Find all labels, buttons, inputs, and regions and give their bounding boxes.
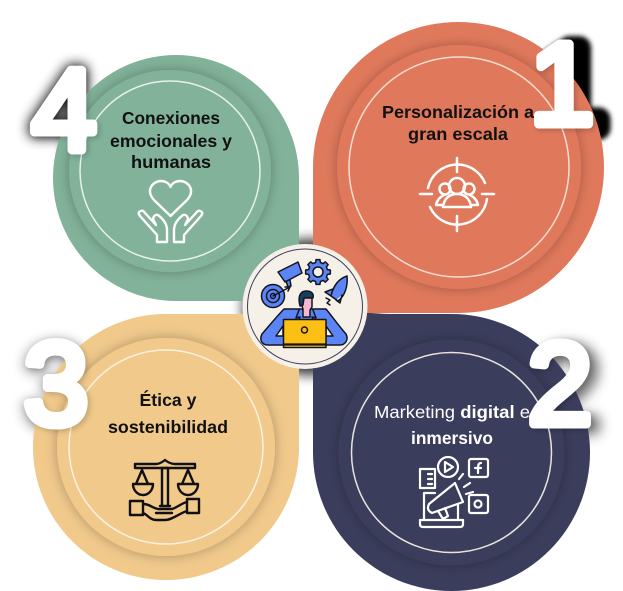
panel: conexiones emocionales (53, 55, 299, 301)
inner circle: green (69, 70, 271, 272)
number 4: 4 (32, 45, 96, 175)
illustration: marketer with laptop (261, 260, 347, 348)
arm gaps (276, 326, 333, 336)
heading: personalización: gran escala (408, 124, 508, 144)
person neck and face (302, 296, 312, 317)
heading: ética: Ética y (140, 389, 197, 410)
badge disc (242, 244, 368, 369)
sparks (326, 298, 330, 305)
inner circle: orange (337, 45, 581, 289)
panel: ética y sostenibilidad (33, 314, 299, 580)
target (262, 284, 290, 308)
number shadows behind petals: 4 (32, 45, 96, 175)
icon: audience target (420, 158, 494, 231)
heading: conexiones: emocionales y (110, 131, 232, 151)
heading: conexiones: humanas (131, 152, 211, 172)
number 2: 2 (528, 319, 592, 449)
icon: scale and hands (130, 460, 199, 520)
petal: green (53, 55, 299, 301)
panel: marketing digital (313, 314, 590, 591)
collar (296, 310, 316, 322)
person body (261, 309, 347, 345)
heading: ética: sostenibilidad (108, 417, 228, 437)
number 1: 1 (530, 19, 594, 149)
gear (306, 260, 330, 284)
heading: marketing digital: Marketing digital e (374, 402, 529, 422)
inner circle: tan (57, 338, 275, 556)
number 3: 3 (24, 319, 88, 449)
heading: personalización: Personalización a (382, 102, 534, 122)
petal: orange (313, 22, 604, 313)
megaphone (278, 262, 302, 287)
heading: marketing digital: inmersivo (411, 428, 493, 448)
number shadows behind petals: 1 (540, 23, 604, 153)
heading: conexiones: Conexiones (122, 108, 220, 128)
number shadows behind petals: 3 (24, 322, 88, 452)
number shadows behind petals: 2 (536, 324, 600, 454)
petal: tan (33, 314, 299, 580)
ring: navy (352, 352, 552, 552)
inner circle: navy (338, 340, 564, 566)
person hair (299, 291, 313, 306)
badge shadow seen through the gaps (243, 239, 379, 375)
icon: digital megaphone (420, 457, 488, 527)
petal: navy (313, 314, 590, 591)
badge ring (248, 249, 362, 364)
rocket (325, 276, 347, 303)
ring: green (80, 81, 260, 261)
ring: tan (69, 350, 263, 544)
number shadows behind petals (24, 23, 604, 454)
icon: heart in hands (139, 181, 202, 242)
panel: personalización (313, 22, 604, 313)
laptop (284, 320, 326, 348)
ring: orange (349, 57, 569, 277)
center badge (242, 244, 368, 369)
